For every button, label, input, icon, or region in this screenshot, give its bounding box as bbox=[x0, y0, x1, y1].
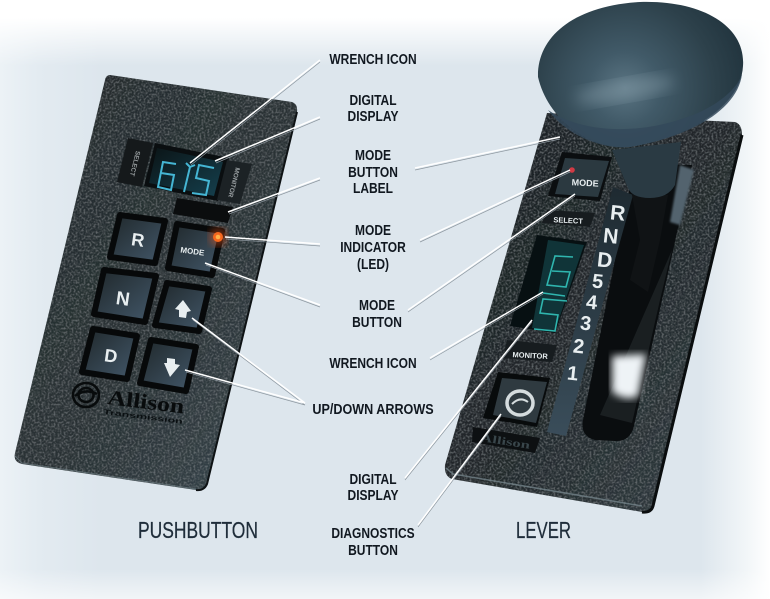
gear position strip: 3 bbox=[579, 313, 592, 336]
gear position strip: N bbox=[602, 224, 619, 249]
button down arrow bbox=[140, 340, 196, 391]
lever knob bbox=[538, 2, 743, 147]
monitor label bbox=[503, 340, 557, 362]
mode button label bbox=[173, 198, 233, 223]
lever slot bbox=[582, 165, 694, 441]
label: mode button: BUTTON bbox=[352, 314, 402, 330]
label: wrench icon lever: WRENCH ICON bbox=[329, 355, 417, 371]
monitor label: MONITOR bbox=[512, 350, 549, 361]
button D bbox=[82, 329, 137, 379]
gear position strip: 4 bbox=[585, 292, 599, 315]
button up arrow bbox=[155, 283, 209, 331]
mode button bbox=[548, 152, 612, 201]
lever stem bbox=[612, 142, 681, 198]
label: mode indicator: (LED) bbox=[357, 256, 389, 272]
digital display bbox=[510, 235, 587, 333]
select label: SELECT bbox=[553, 215, 584, 226]
label: diagnostics button: DIAGNOSTICS bbox=[331, 525, 415, 541]
select label bbox=[542, 210, 595, 227]
icon: down arrow bbox=[164, 358, 180, 377]
button R bbox=[110, 215, 165, 263]
button N: N bbox=[115, 288, 131, 311]
faceplate bbox=[15, 75, 297, 490]
label: mode indicator: MODE bbox=[355, 222, 391, 238]
gear position strip: 1 bbox=[566, 363, 579, 386]
callout lines left bbox=[185, 60, 320, 405]
label: mode button label: MODE bbox=[355, 147, 391, 163]
label: digital display: DISPLAY bbox=[348, 108, 398, 124]
logo plate: Allison bbox=[480, 432, 531, 452]
digits 6, wrench, 5 bbox=[158, 162, 214, 195]
callout lines right bbox=[405, 137, 575, 527]
button D: D bbox=[103, 345, 119, 367]
digital display bbox=[144, 143, 229, 201]
label: mode indicator: INDICATOR bbox=[340, 239, 406, 255]
Allison logo: Allison bbox=[106, 385, 186, 418]
label: diagnostics button: BUTTON bbox=[348, 542, 398, 558]
icon: Allison emblem bbox=[507, 391, 533, 415]
panel: lever selector bbox=[445, 2, 743, 512]
label: wrench icon: WRENCH ICON bbox=[329, 51, 417, 67]
icon: up arrow bbox=[175, 300, 191, 318]
label: digital display lever: DIGITAL bbox=[349, 471, 397, 487]
gear position strip: R bbox=[609, 201, 626, 226]
Allison logo bbox=[73, 383, 186, 426]
gear position strip: 5 bbox=[591, 271, 604, 294]
button mode: MODE bbox=[180, 245, 206, 258]
label: digital display: DIGITAL bbox=[349, 92, 397, 108]
lever shaft bbox=[630, 195, 668, 292]
gear position strip: D bbox=[596, 248, 613, 273]
base plate bbox=[445, 113, 742, 512]
button mode bbox=[168, 224, 222, 275]
button N bbox=[94, 270, 156, 322]
select tab bbox=[117, 138, 153, 187]
mode LED bbox=[569, 167, 575, 173]
label: mode button: MODE bbox=[359, 297, 395, 313]
heading: lever: LEVER bbox=[516, 517, 571, 543]
label: mode button label: BUTTON bbox=[348, 164, 398, 180]
panel: pushbutton selector bbox=[15, 75, 297, 490]
button R: R bbox=[130, 229, 146, 251]
monitor tab bbox=[217, 160, 252, 204]
label: mode button label: LABEL bbox=[353, 180, 393, 196]
heading: pushbutton: PUSHBUTTON bbox=[138, 517, 258, 543]
label: digital display lever: DISPLAY bbox=[348, 487, 398, 503]
label: up/down arrows: UP/DOWN ARROWS bbox=[312, 400, 434, 417]
mode indicator LED bbox=[209, 228, 227, 246]
digits 6, wrench, 5 bbox=[534, 256, 573, 331]
Allison logo: Transmission bbox=[103, 409, 183, 426]
select tab: SELECT bbox=[128, 150, 141, 177]
gear position strip: 2 bbox=[572, 336, 585, 359]
logo plate bbox=[472, 427, 540, 453]
diagnostics button bbox=[483, 372, 550, 427]
mode button: MODE bbox=[571, 177, 599, 189]
gear position strip bbox=[547, 187, 633, 436]
monitor tab: MONITOR bbox=[226, 167, 241, 198]
